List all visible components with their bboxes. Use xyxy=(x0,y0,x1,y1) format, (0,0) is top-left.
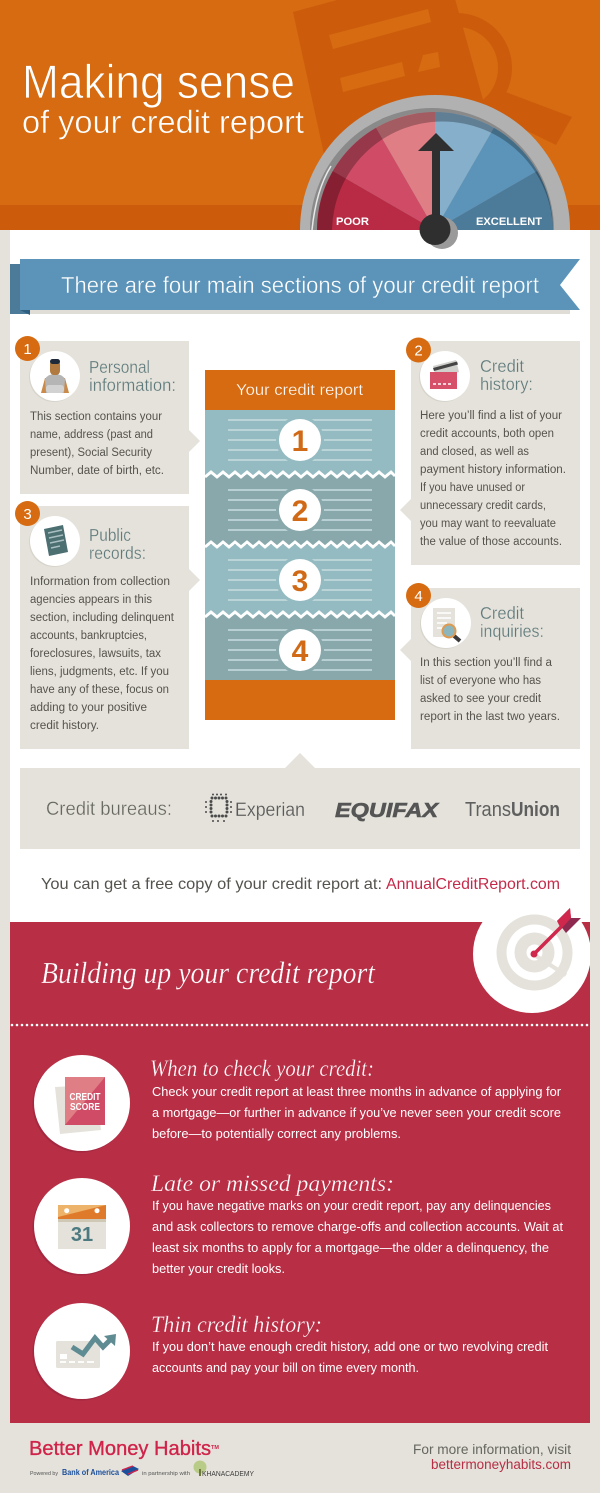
heading: personal information: information: xyxy=(89,375,176,395)
text: personal information: This section contains your xyxy=(30,411,162,423)
heading: personal information: Personal xyxy=(89,357,150,377)
text: late or missed: and ask collectors to remove charge-offs and collection accounts. Wait at xyxy=(152,1220,564,1234)
text: credit history xyxy=(420,410,566,548)
panel: credit history xyxy=(400,338,580,565)
text: credit inquiries: list of everyone who has xyxy=(420,675,541,687)
logo: Experian: Experian xyxy=(235,799,305,821)
logo: Better Money Habits: TM xyxy=(211,1445,219,1451)
ribbon heading: There are four main sections of your credit report xyxy=(61,272,539,298)
report section 1: 1 xyxy=(292,425,308,458)
logo: Better Money Habits: Better Money Habits xyxy=(29,1438,211,1460)
text: public records: adding to your positive xyxy=(30,702,147,714)
badge 3 xyxy=(15,501,40,526)
report section 3: 3 xyxy=(292,565,308,598)
text: credit inquiries: report in the last two years. xyxy=(420,711,560,723)
report section 1 xyxy=(228,416,372,464)
icon: calendar xyxy=(32,1178,130,1276)
heading: late or missed: Late or missed payments: xyxy=(150,1171,394,1196)
text: late or missed: better your credit looks. xyxy=(152,1262,285,1276)
heading: when to check: When to check your credit: xyxy=(150,1056,374,1081)
heading: personal information xyxy=(89,357,176,395)
logo: TransUnion xyxy=(465,799,560,821)
heading: credit history: history: xyxy=(480,374,533,394)
logo: powered by Bank of America: Powered by xyxy=(30,1471,58,1477)
text: more information: For more information, visit xyxy=(413,1442,571,1457)
text: public records: liens, judgments, etc. If you xyxy=(30,666,169,678)
text: more information xyxy=(413,1442,571,1472)
heading: credit bureaus: Credit bureaus: xyxy=(46,798,172,820)
panel: personal information xyxy=(15,336,200,494)
text: late or missed: least six months to apply for a mortgage—the older a delinquency, the xyxy=(152,1241,549,1255)
text: when to check: before—to potentially correct any problems. xyxy=(152,1127,401,1141)
item: when to check your credit xyxy=(32,1055,561,1152)
heading: credit inquiries: Credit xyxy=(480,603,524,623)
gauge label: excellent: EXCELLENT xyxy=(476,216,542,228)
report section 4 xyxy=(228,626,372,674)
text: credit history: and closed, as well as xyxy=(420,446,529,458)
footer xyxy=(29,1438,571,1478)
heading: building up your credit report: Building up your credit report xyxy=(41,955,376,990)
gauge: credit score meter xyxy=(300,95,570,249)
gauge needle xyxy=(418,133,458,249)
panel: your credit report document xyxy=(205,370,395,720)
text: when to check xyxy=(152,1085,561,1141)
icon: target with arrow xyxy=(473,908,590,1013)
text: personal information: Number, date of birth, etc. xyxy=(30,465,164,477)
text: late or missed: If you have negative marks on your credit report, pay any delinquencies xyxy=(152,1199,551,1213)
free copy callout: AnnualCreditReport.com xyxy=(386,876,560,893)
item: thin credit history xyxy=(32,1303,549,1400)
text: credit history: credit accounts, both open xyxy=(420,428,554,440)
report section 4: 4 xyxy=(292,635,309,668)
text: when to check: Check your credit report at least three months in advance of applying for xyxy=(152,1085,561,1099)
text: public records xyxy=(30,576,175,732)
heading: public records: records: xyxy=(89,543,146,563)
text: credit inquiries: asked to see your credit xyxy=(420,693,542,705)
icon: credit score: CREDIT xyxy=(70,1092,100,1103)
icon: records document xyxy=(29,516,80,567)
free copy callout xyxy=(41,876,560,893)
ribbon heading xyxy=(10,259,580,315)
badge 1: 1 xyxy=(23,341,32,358)
icon: credit cards xyxy=(419,351,470,402)
panel: credit bureaus xyxy=(20,753,580,849)
logo: Experian xyxy=(206,794,305,821)
logo: Khan Academy partnership: KHANACADEMY xyxy=(202,1469,254,1478)
panel: credit inquiries xyxy=(400,583,580,749)
text: when to check: a mortgage—or further in advance if you’ve never seen your credit score xyxy=(152,1106,561,1120)
report section 2 xyxy=(228,486,372,534)
header banner xyxy=(0,0,600,230)
logo: TransUnion: Union xyxy=(511,799,560,821)
text: credit history: payment history information. xyxy=(420,464,566,476)
text: public records: credit history. xyxy=(30,720,99,732)
report section 2: 2 xyxy=(292,495,308,528)
text: credit history: unnecessary credit cards, xyxy=(420,500,546,512)
text: credit history: the value of those accounts. xyxy=(420,536,562,548)
badge 1 xyxy=(15,336,40,361)
logo: Khan Academy partnership: in partnership with xyxy=(142,1471,190,1477)
icon: person xyxy=(29,351,80,402)
text: credit history: you may want to reevaluate xyxy=(420,518,556,530)
icon: credit score xyxy=(32,1055,130,1152)
text: public records: Information from collection xyxy=(30,576,170,588)
text: public records: foreclosures, lawsuits, tax xyxy=(30,648,161,660)
icon: card with rising arrow xyxy=(32,1303,130,1400)
text: credit inquiries: In this section you’ll find a xyxy=(420,657,553,669)
logo: Khan Academy partnership xyxy=(142,1460,254,1478)
gauge label: poor: POOR xyxy=(336,216,369,228)
badge 2 xyxy=(406,338,431,362)
logo: TransUnion: Trans xyxy=(465,799,511,821)
title: of your credit report xyxy=(22,104,304,140)
logo: powered by Bank of America xyxy=(30,1466,139,1477)
text: credit history: Here you’ll find a list of your xyxy=(420,410,562,422)
icon: credit score: SCORE xyxy=(70,1102,100,1113)
icon: calendar: 31 xyxy=(71,1224,93,1246)
text: personal information xyxy=(30,411,164,477)
heading: credit history xyxy=(480,356,533,394)
text: thin credit history: If you don’t have enough credit history, add one or two revolving credit xyxy=(152,1340,549,1354)
badge 4 xyxy=(406,583,431,608)
text: public records: agencies appears in this xyxy=(30,594,152,606)
text: thin credit history: accounts and pay your bill on time every month. xyxy=(152,1361,419,1375)
title: Making sense xyxy=(22,55,295,108)
report section 3 xyxy=(228,556,372,604)
icon: background document and magnifier xyxy=(293,0,572,153)
heading: thin credit history: Thin credit history: xyxy=(151,1312,322,1337)
text: personal information: name, address (past and xyxy=(30,429,153,441)
text: thin credit history xyxy=(152,1340,549,1375)
text: public records: accounts, bankruptcies, xyxy=(30,630,147,642)
free copy callout: You can get a free copy of your credit report at: xyxy=(41,876,382,893)
text: public records: section, including delinquent xyxy=(30,612,175,624)
logo: Equifax: EQUIFAX xyxy=(335,800,440,822)
text: more information: bettermoneyhabits.com xyxy=(431,1457,571,1472)
icon: document with magnifier xyxy=(420,598,471,649)
text: late or missed xyxy=(152,1199,564,1276)
badge 2: 2 xyxy=(414,342,423,360)
heading: credit inquiries: inquiries: xyxy=(480,621,544,641)
text: credit inquiries xyxy=(420,657,560,723)
item: late or missed payments xyxy=(32,1171,564,1276)
text: personal information: present), Social Security xyxy=(30,447,152,459)
heading: credit history: Credit xyxy=(480,356,524,376)
badge 3: 3 xyxy=(23,506,32,523)
title xyxy=(22,55,304,140)
heading: public records xyxy=(89,525,146,563)
report heading: Your credit report xyxy=(236,382,364,399)
logo: powered by Bank of America: Bank of America xyxy=(62,1467,119,1477)
heading: credit inquiries xyxy=(480,603,544,641)
panel: building up your credit report xyxy=(10,895,591,1423)
text: credit history: If you have unused or xyxy=(420,482,525,494)
heading: public records: Public xyxy=(89,525,131,545)
badge 4: 4 xyxy=(414,588,423,605)
panel: public records xyxy=(15,501,200,749)
text: public records: have any of these, focus on xyxy=(30,684,169,696)
